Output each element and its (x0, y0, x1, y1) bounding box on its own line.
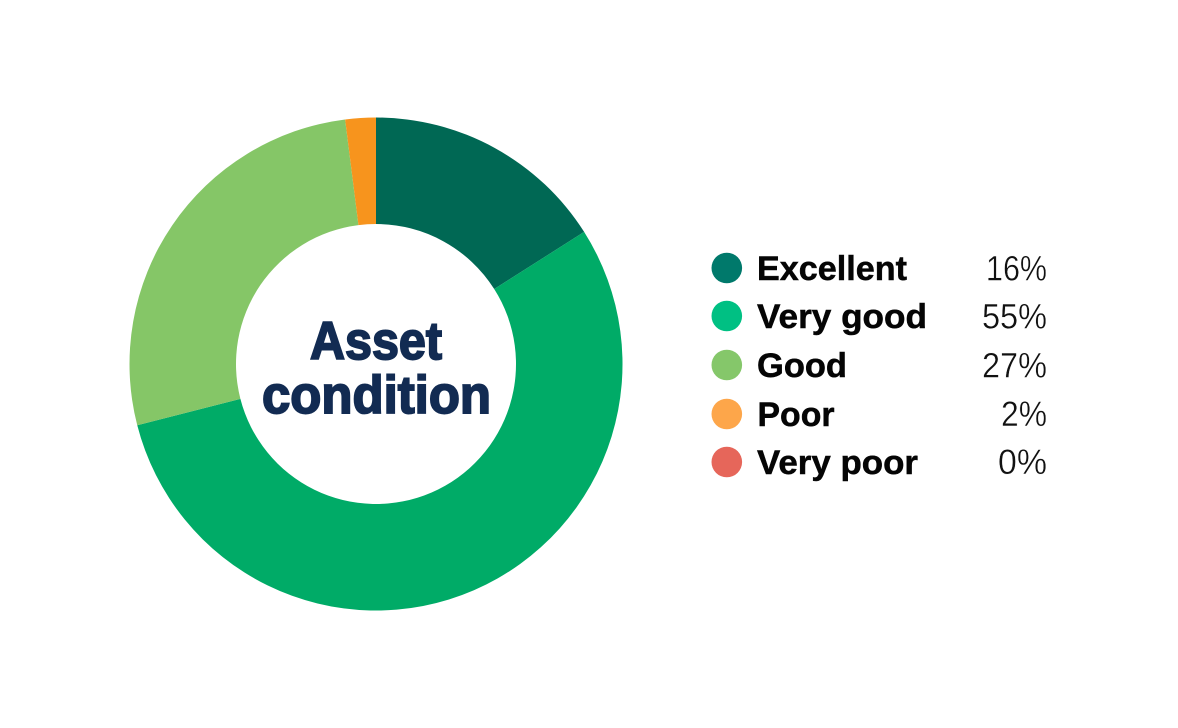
legend row: Very good: 55% (982, 298, 1047, 336)
legend row: Poor: 2% (1001, 395, 1047, 434)
legend row: Excellent: Excellent (757, 250, 907, 288)
segment: Poor 2% (345, 118, 376, 225)
legend row: Good (712, 346, 1047, 386)
legend row: Very poor: 0% (998, 443, 1047, 482)
legend row: Good: Good (757, 347, 847, 385)
donut centre title: condition (262, 366, 491, 425)
legend (712, 250, 1047, 482)
segment: Good 27% (130, 119, 358, 425)
legend row: Very good (712, 298, 1047, 336)
legend row: Poor: Poor (758, 396, 834, 434)
legend row: Excellent: 16% (986, 250, 1047, 288)
legend row: Very poor: Very poor (757, 444, 918, 482)
segment: Excellent 16% (376, 118, 584, 289)
donut centre title: Asset (310, 312, 442, 371)
legend row: Poor (712, 395, 1047, 434)
legend row: Excellent (712, 250, 1047, 288)
donut chart (130, 118, 623, 611)
legend row: Good: 27% (982, 346, 1047, 386)
donut centre title (262, 312, 491, 425)
legend row: Very poor (712, 443, 1047, 482)
legend row: Very good: Very good (757, 298, 927, 336)
segment: Very good 55% (137, 232, 623, 611)
